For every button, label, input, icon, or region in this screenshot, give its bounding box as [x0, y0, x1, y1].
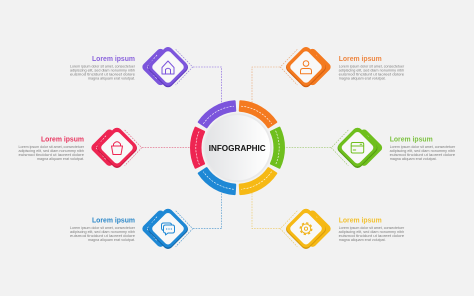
body text: euismod tincidunt ut laoreet dolore [339, 234, 404, 238]
title: Lorem ipsum [339, 54, 382, 63]
connector: blue [193, 192, 222, 229]
body text: euismod tincidunt ut laoreet dolore [70, 234, 135, 238]
connector: orange [252, 67, 280, 103]
body text: magna aliquam erat volutpat. [88, 76, 135, 80]
icon: person [300, 61, 312, 74]
ring segment: yellow [236, 166, 279, 198]
body text: magna aliquam erat volutpat. [339, 238, 386, 242]
step: orange person [280, 45, 405, 89]
icon: bag [112, 142, 122, 154]
body text: magna aliquam erat volutpat. [37, 157, 84, 161]
connector: red [142, 147, 190, 149]
body text: magna aliquam erat volutpat. [390, 157, 437, 161]
title: Lorem ipsum [92, 216, 135, 224]
body text: euismod tincidunt ut laoreet dolore [18, 153, 84, 157]
body text [70, 226, 136, 242]
badge: red [90, 126, 142, 170]
badge: purple [141, 45, 193, 89]
badge: orange [280, 45, 332, 89]
body text: Lorem ipsum dolor sit amet, consectetuer [70, 226, 136, 230]
body text: Lorem ipsum dolor sit amet, consectetuer [390, 145, 456, 149]
ring segment: red [191, 128, 204, 168]
connector: green [285, 147, 331, 149]
title: Lorem ipsum [390, 134, 433, 144]
body text: Lorem ipsum dolor sit amet, consectetuer [339, 64, 405, 68]
central ring and hub [191, 97, 284, 198]
ring segment: orange [236, 97, 279, 129]
icon: chat bubbles [162, 223, 174, 235]
ring segment: green [271, 128, 284, 168]
body text: adipiscing elit, sed diam nonummy nibh [70, 68, 135, 72]
badge: green [331, 126, 384, 170]
body text [390, 145, 456, 161]
body text: Lorem ipsum dolor sit amet, consectetuer [18, 145, 85, 149]
title: Lorem ipsum [41, 134, 84, 144]
ring segment: purple [196, 97, 239, 129]
body text: adipiscing elit, sed diam nonummy nibh [390, 149, 455, 153]
body text: adipiscing elit, sed diam nonummy nibh [339, 68, 404, 72]
title: Lorem ipsum [92, 54, 135, 63]
step: red bag [18, 126, 142, 170]
body text [18, 145, 85, 161]
body text: euismod tincidunt ut laoreet dolore [339, 72, 404, 76]
connector: yellow [252, 192, 280, 229]
connector: purple [193, 67, 222, 103]
step: green card [331, 126, 456, 170]
title: Lorem ipsum [339, 216, 382, 224]
badge: blue [141, 207, 193, 251]
body text [339, 226, 405, 242]
body text: adipiscing elit, sed diam nonummy nibh [18, 149, 84, 153]
body text: Lorem ipsum dolor sit amet, consectetuer [70, 64, 136, 68]
icon: house [162, 61, 174, 74]
step: purple home [70, 45, 193, 89]
body text: adipiscing elit, sed diam nonummy nibh [70, 230, 135, 234]
body text: magna aliquam erat volutpat. [88, 238, 135, 242]
ring segment: blue [196, 166, 239, 198]
body text: Lorem ipsum dolor sit amet, consectetuer [339, 226, 405, 230]
body text [339, 64, 405, 80]
body text [70, 64, 136, 80]
icon: gear [300, 223, 312, 234]
body text: euismod tincidunt ut laoreet dolore [390, 153, 455, 157]
body text: adipiscing elit, sed diam nonummy nibh [339, 230, 404, 234]
hub label: INFOGRAPHIC [209, 143, 266, 153]
step: yellow gear [280, 207, 405, 251]
step: blue chat [70, 207, 193, 251]
badge: yellow [280, 207, 332, 251]
body text: magna aliquam erat volutpat. [339, 76, 386, 80]
body text: euismod tincidunt ut laoreet dolore [70, 72, 135, 76]
icon: card [351, 142, 364, 153]
